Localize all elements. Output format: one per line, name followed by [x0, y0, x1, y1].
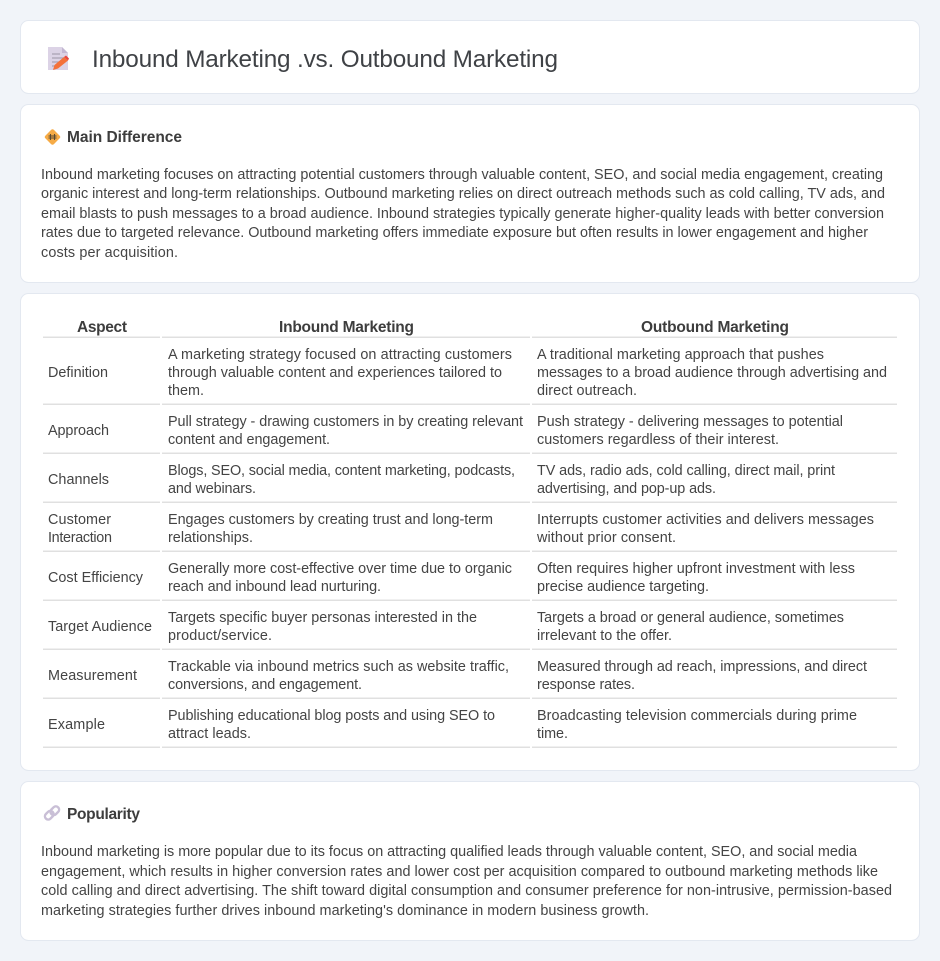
title: Inbound Marketing .vs. Outbound Marketing: [92, 46, 558, 73]
text block: main difference body: costs per acquisition.: [41, 245, 178, 261]
row: measurement: response rates.: [537, 677, 635, 693]
row: target audience: Targets specific buyer personas interested in the: [168, 610, 477, 626]
row: definition: A traditional marketing approach that pushes: [537, 347, 824, 363]
row: channels: TV ads, radio ads, cold calling, direct mail, print: [537, 463, 835, 479]
row: example: attract leads.: [168, 726, 251, 742]
row: example: time.: [537, 726, 568, 742]
row: example: Publishing educational blog posts and using SEO to: [168, 708, 495, 724]
icon: document with pencil: [48, 47, 69, 70]
text block: main difference body: organic interest and long-term relationships. Outbound marketing relies on direct outreach methods such as cold calling, TV ads, and: [41, 186, 885, 202]
heading: main difference: Main Difference: [67, 129, 182, 146]
row: cost efficiency: Often requires higher upfront investment with less: [537, 561, 855, 577]
text block: popularity body: Inbound marketing is more popular due to its focus on attracting qualified leads through valuable content, SEO, and social media: [41, 844, 857, 860]
row: customer interaction: Interaction: [48, 530, 112, 546]
row: measurement: [48, 659, 867, 693]
row: measurement: Measurement: [48, 668, 137, 684]
row: approach: Approach: [48, 423, 109, 439]
text block: main difference body: email blasts to push messages to a broad audience. Inbound strategies typically generate higher-quality leads with better conversion: [41, 206, 884, 222]
row: example: [48, 708, 857, 742]
row: customer interaction: without prior consent.: [536, 530, 676, 546]
row: cost efficiency: Cost Efficiency: [48, 570, 144, 586]
panel: comparison table: [20, 294, 920, 770]
row: cost efficiency: Generally more cost-effective over time due to organic: [168, 561, 512, 577]
panel: popularity: [20, 782, 920, 940]
row: channels: and webinars.: [168, 481, 256, 497]
row: approach: Push strategy - delivering messages to potential: [537, 414, 843, 430]
row: customer interaction: Interrupts customer activities and delivers messages: [537, 512, 874, 528]
row: target audience: irrelevant to the offer.: [537, 628, 672, 644]
row: target audience: Target Audience: [48, 619, 152, 635]
text block: popularity body: cold calling and direct advertising. The shift toward digital consumption and consumer preference for non-intrusive, permission-based: [41, 883, 892, 899]
row: target audience: Targets a broad or general audience, sometimes: [537, 610, 844, 626]
row: definition: [48, 347, 887, 399]
row: definition: through valuable content and experiences tailored to: [168, 365, 502, 381]
row: approach: Pull strategy - drawing customers in by creating relevant: [168, 414, 523, 430]
row: definition: messages to a broad audience through advertising and: [537, 365, 887, 381]
row: approach: customers regardless of their interest.: [537, 432, 779, 448]
row: customer interaction: relationships.: [168, 530, 253, 546]
row: channels: Channels: [48, 472, 109, 488]
row: example: Broadcasting television commercials during prime: [537, 708, 857, 724]
row: customer interaction: Customer: [48, 512, 111, 528]
icon: chain link: [44, 805, 60, 821]
row: definition: direct outreach.: [537, 383, 637, 399]
table header row: Aspect: [77, 319, 127, 336]
row: channels: advertising, and pop-up ads.: [537, 481, 716, 497]
row: channels: [48, 463, 835, 497]
text block: main difference body: [41, 167, 885, 261]
icon: diamond sign: [44, 129, 61, 145]
row: definition: them.: [168, 383, 204, 399]
row: approach: content and engagement.: [168, 432, 330, 448]
row: cost efficiency: [48, 561, 855, 595]
text block: main difference body: Inbound marketing focuses on attracting potential customers through valuable content, SEO, and social media engagement, creating: [41, 167, 883, 183]
row: definition: A marketing strategy focused on attracting customers: [168, 347, 512, 363]
row: measurement: Trackable via inbound metrics such as website traffic,: [168, 659, 509, 675]
panel: page header: [20, 20, 920, 94]
row: cost efficiency: precise audience targeting.: [537, 579, 709, 595]
row: approach: [48, 414, 843, 448]
row: target audience: [48, 610, 844, 644]
row: measurement: Measured through ad reach, impressions, and direct: [537, 659, 867, 675]
table header row: [77, 319, 789, 336]
panel: main difference: [20, 104, 920, 282]
row: cost efficiency: reach and inbound lead nurturing.: [168, 579, 381, 595]
table header row: Outbound Marketing: [641, 319, 789, 336]
table header row: Inbound Marketing: [279, 319, 414, 336]
text block: main difference body: rates due to targeted relevance. Outbound marketing offers immediate exposure but often results in lower engagement and higher: [41, 225, 868, 241]
text block: popularity body: marketing strategies further drives inbound marketing's dominance in modern business growth.: [41, 903, 649, 919]
text block: popularity body: engagement, which results in higher conversion rates and lower cost per acquisition compared to outbound marketing methods like: [41, 864, 878, 880]
heading: popularity: Popularity: [67, 806, 140, 823]
row: example: Example: [48, 717, 105, 733]
row: measurement: conversions, and engagement.: [168, 677, 362, 693]
row: channels: Blogs, SEO, social media, content marketing, podcasts,: [168, 463, 515, 479]
row: target audience: product/service.: [168, 628, 272, 644]
row: customer interaction: Engages customers by creating trust and long-term: [168, 512, 493, 528]
row: customer interaction: [48, 512, 874, 546]
text block: popularity body: [41, 844, 892, 919]
row: definition: Definition: [48, 365, 108, 381]
